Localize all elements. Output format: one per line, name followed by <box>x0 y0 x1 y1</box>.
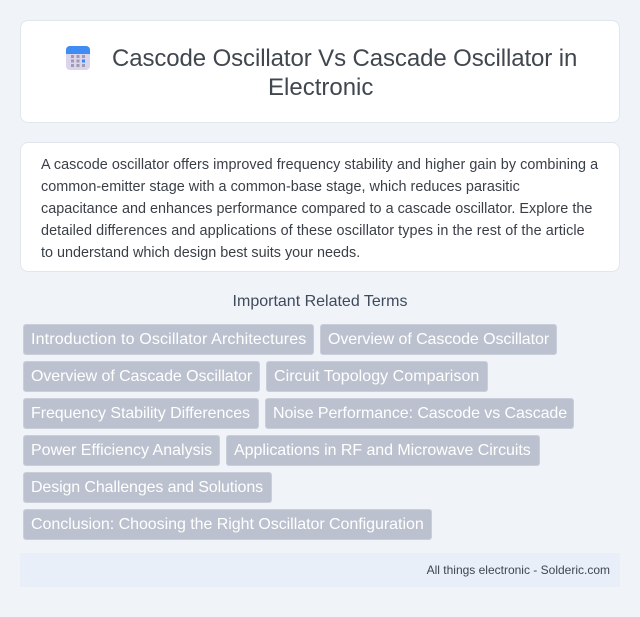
description text <box>41 157 598 261</box>
footer text: All things electronic - Solderic.com <box>427 563 610 577</box>
tag: Introduction to Oscillator Architectures <box>31 331 306 348</box>
description text: detailed differences and applications of these oscillator types in the rest of the article <box>41 223 585 239</box>
tag: Power Efficiency Analysis <box>31 442 212 459</box>
tag <box>265 398 574 429</box>
tag: Circuit Topology Comparison <box>274 368 479 385</box>
title <box>112 45 577 101</box>
heading: related terms: Important Related Terms <box>233 293 407 310</box>
tag <box>23 324 314 355</box>
title: Electronic <box>268 74 373 101</box>
description text: to understand which design best suits your needs. <box>41 245 360 261</box>
tag <box>23 509 432 540</box>
description panel <box>20 142 620 272</box>
tag <box>23 435 220 466</box>
description text: capacitance and enhances performance compared to a cascade oscillator. Explore the <box>41 201 592 217</box>
description text: common-emitter stage with a common-base stage, which reduces parasitic <box>41 179 520 195</box>
tag: Noise Performance: Cascode vs Cascade <box>273 405 567 422</box>
icon: calendar <box>66 46 90 70</box>
description text: A cascode oscillator offers improved frequency stability and higher gain by combining a <box>41 157 598 173</box>
related terms tags <box>23 324 574 540</box>
tag <box>23 472 272 503</box>
tag <box>266 361 488 392</box>
tag: Applications in RF and Microwave Circuits <box>234 442 531 459</box>
tag: Frequency Stability Differences <box>31 405 250 422</box>
tag <box>23 398 259 429</box>
title panel <box>20 20 620 123</box>
tag <box>320 324 557 355</box>
tag: Overview of Cascade Oscillator <box>31 368 252 385</box>
tag <box>23 361 260 392</box>
tag: Design Challenges and Solutions <box>31 479 263 496</box>
tag <box>226 435 540 466</box>
tag: Overview of Cascode Oscillator <box>328 331 549 348</box>
footer <box>20 553 620 587</box>
title: Cascode Oscillator Vs Cascade Oscillator in <box>112 45 577 72</box>
tag: Conclusion: Choosing the Right Oscillator Configuration <box>31 516 424 533</box>
